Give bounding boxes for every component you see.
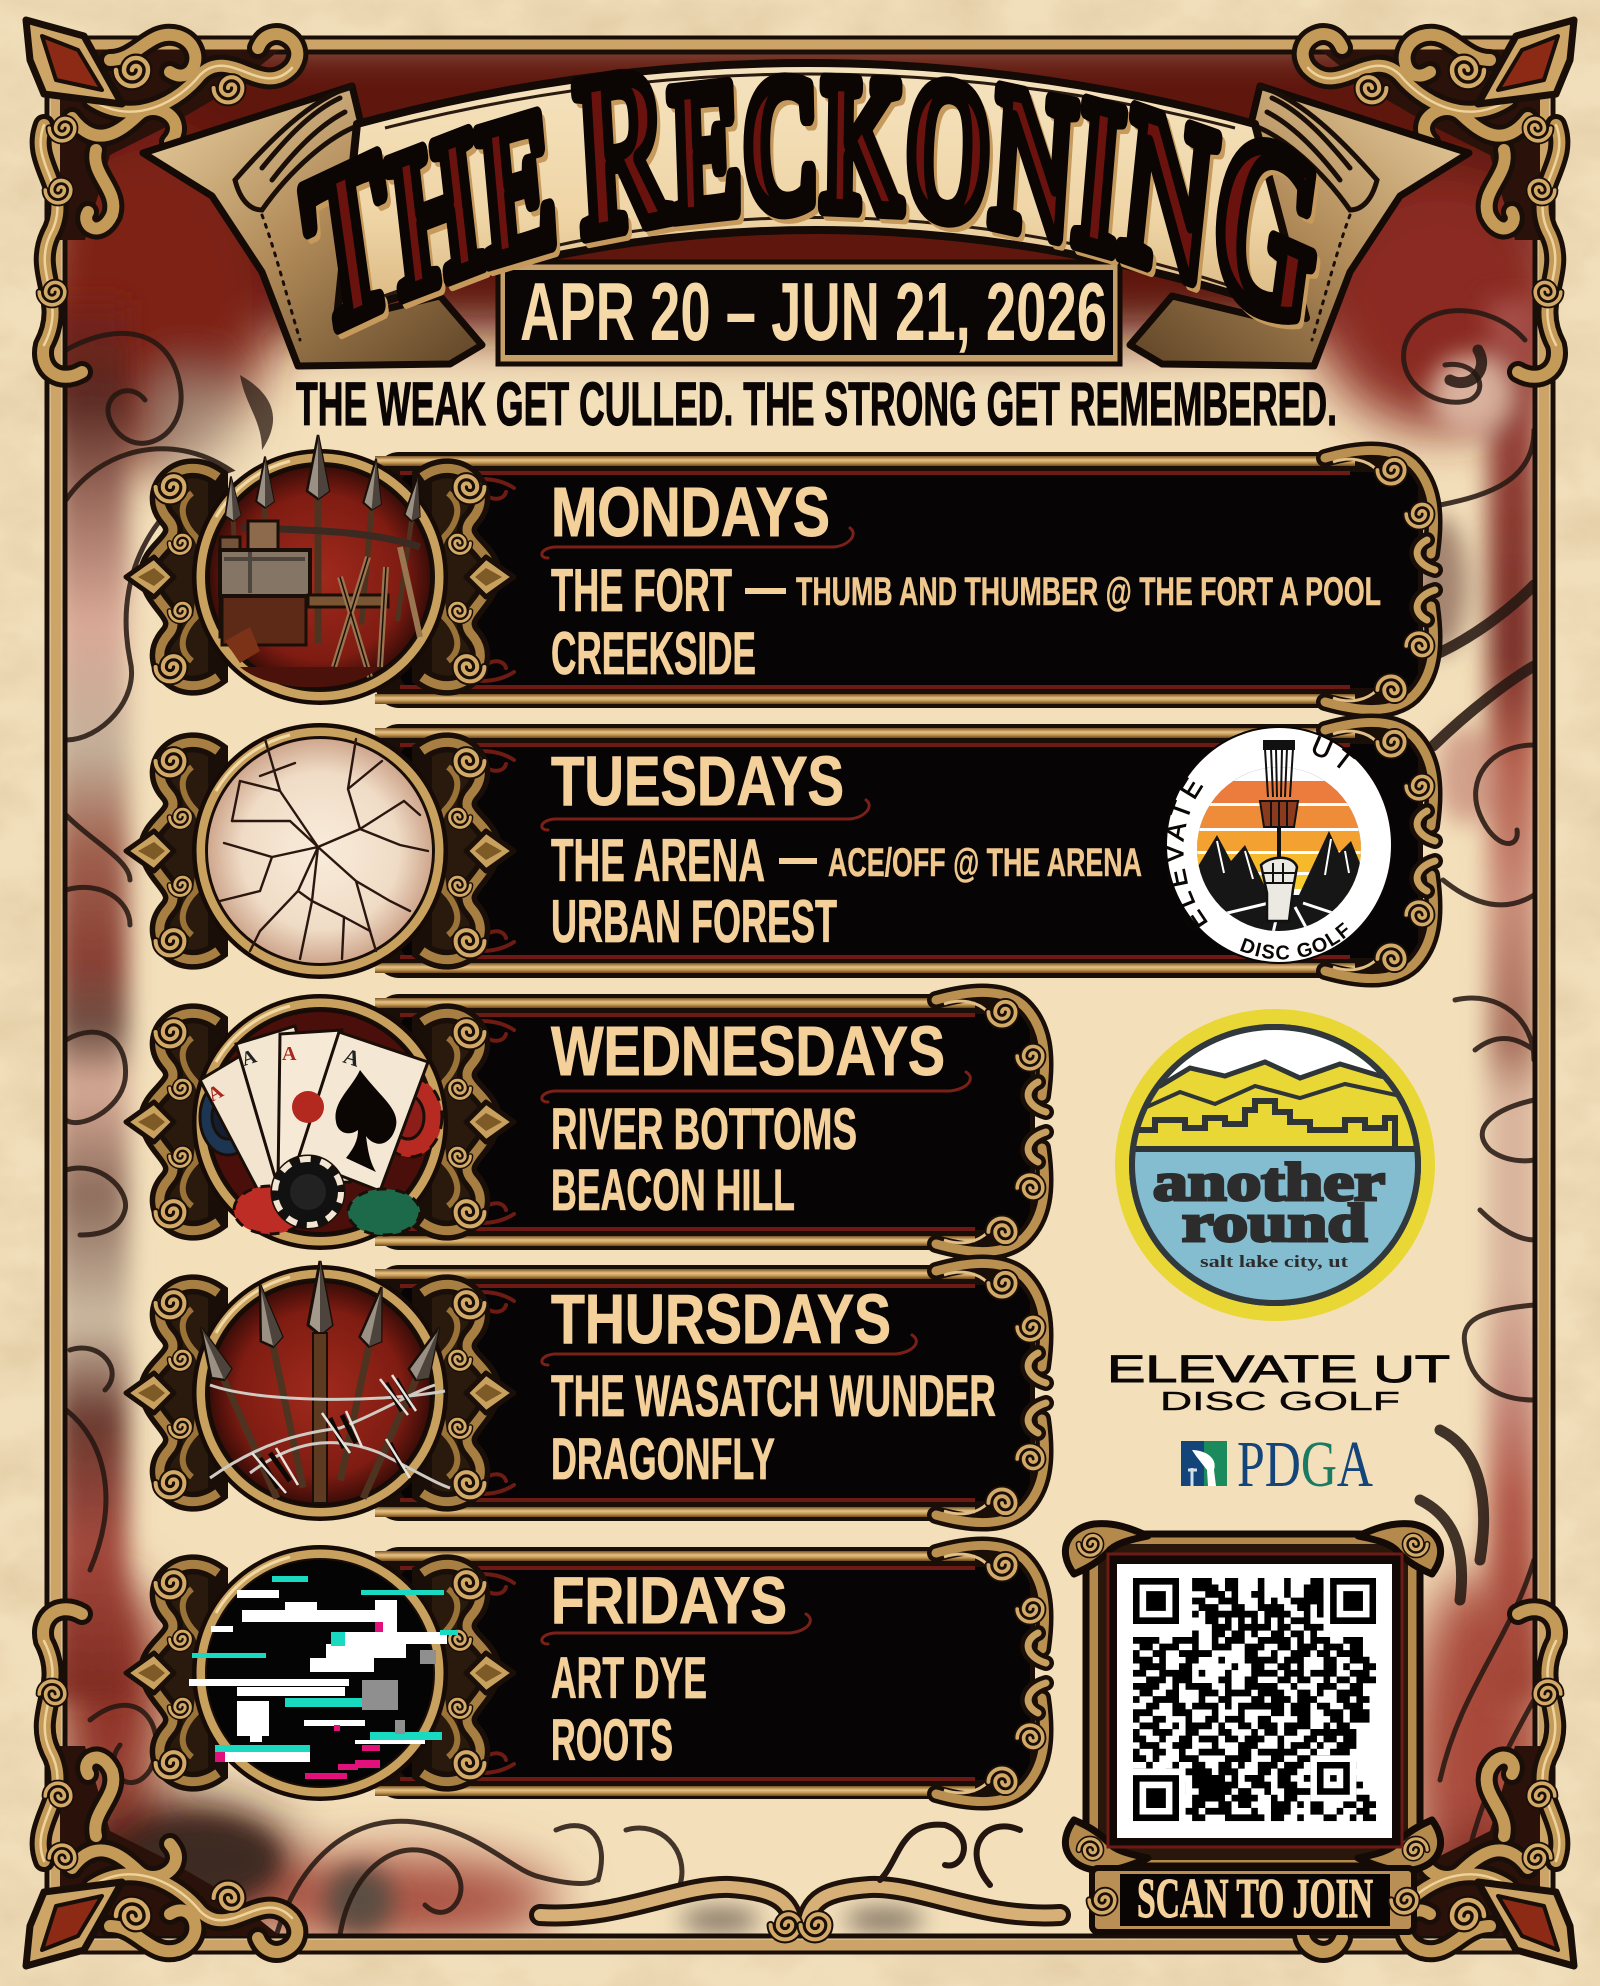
scan banner [1089,1868,1417,1932]
heading: THURSDAYS [551,1280,891,1358]
panel body [375,1264,1046,1522]
ribbon tail right [1130,86,1469,366]
qr code [1133,1578,1376,1821]
medallion: glitch [126,1545,514,1801]
panel: tuesdays [124,714,1443,1020]
panel: wednesdays [126,992,1046,1252]
course: urban forest: URBAN FOREST [551,888,837,955]
panel body [375,992,1046,1252]
medallion: fort [126,435,514,705]
badge lettering: DISC GOLF [1240,922,1348,960]
course: roots: ROOTS [551,1708,673,1773]
panel body [375,1546,1046,1802]
panel: mondays [126,435,1435,710]
title text: THE RECKONING [308,82,1320,340]
tattoo swirl lines [66,311,1534,1935]
medallion: cards and chips: A [204,1080,228,1106]
medallion: cards and chips: A [239,1045,260,1071]
heading: FRIDAYS [551,1563,787,1637]
ribbon rolls [235,86,1377,340]
heading: WEDNESDAYS [551,1012,945,1090]
logo: pdga: PDGA [1237,1428,1373,1501]
ornate qr frame [1065,1524,1441,1870]
medallion: spears and barbed wire [126,1261,514,1521]
event note: ACE/OFF @ THE ARENA [828,841,1142,885]
course: beacon hill: BEACON HILL [551,1158,795,1223]
title banner [140,59,1472,370]
divider [542,1335,916,1365]
divider [542,1614,810,1644]
course: creekside: CREEKSIDE [551,620,756,687]
fist [1261,858,1297,921]
medallion: cards and chips: A [282,1043,297,1065]
wordmark: elevate ut disc golf: ELEVATE UT [1107,1349,1450,1391]
panel: thursdays [126,1261,1046,1522]
dash: — [745,553,786,620]
divider [542,800,869,830]
ribbon tail left [143,86,482,366]
divider [542,528,853,558]
medallion: cards and chips: A [340,1043,363,1072]
course: river bottoms: RIVER BOTTOMS [551,1097,857,1162]
course: the arena: THE ARENA [551,827,765,894]
date: APR 20 – JUN 21, 2026 [520,265,1107,358]
heading: MONDAYS [551,473,830,551]
wordmark: elevate ut disc golf: DISC GOLF [1160,1386,1400,1416]
medallion: cracked glass [126,723,514,979]
disc golf basket [1260,741,1298,865]
logo: another round [1110,1009,1440,1321]
dash: — [779,823,817,890]
logo: another round: round [1182,1193,1367,1253]
date plaque backing [498,262,1120,364]
qr panel [1065,1524,1441,1932]
heading: TUESDAYS [551,742,844,820]
medallion: cards and chips [126,994,514,1250]
logo: pdga [1181,1428,1373,1501]
panel body [375,722,1435,978]
course: art dye: ART DYE [551,1646,707,1711]
course: the fort: THE FORT [551,557,732,624]
badge lettering: UT [1312,736,1355,768]
badge lettering [1167,736,1355,960]
course: dragonfly: DRAGONFLY [551,1427,775,1492]
logo: another round: another [1153,1152,1385,1212]
logo: another round: salt lake city, ut [1200,1252,1348,1271]
divider [542,1072,970,1102]
big spade [335,1070,396,1172]
panel: fridays [126,1545,1046,1802]
course: the wasatch wunder: THE WASATCH WUNDER [551,1364,996,1429]
title text inline: THE RECKONING [296,68,1318,335]
bottom ribbon flourish [540,1825,1060,1925]
panel body [375,450,1435,710]
badge lettering: ELEVATE [1167,777,1208,928]
main arch [337,63,1306,318]
wordmark: elevate ut disc golf [1107,1349,1450,1416]
logo: elevate ut badge [1167,726,1391,964]
scan to join label: SCAN TO JOIN [1137,1868,1373,1930]
